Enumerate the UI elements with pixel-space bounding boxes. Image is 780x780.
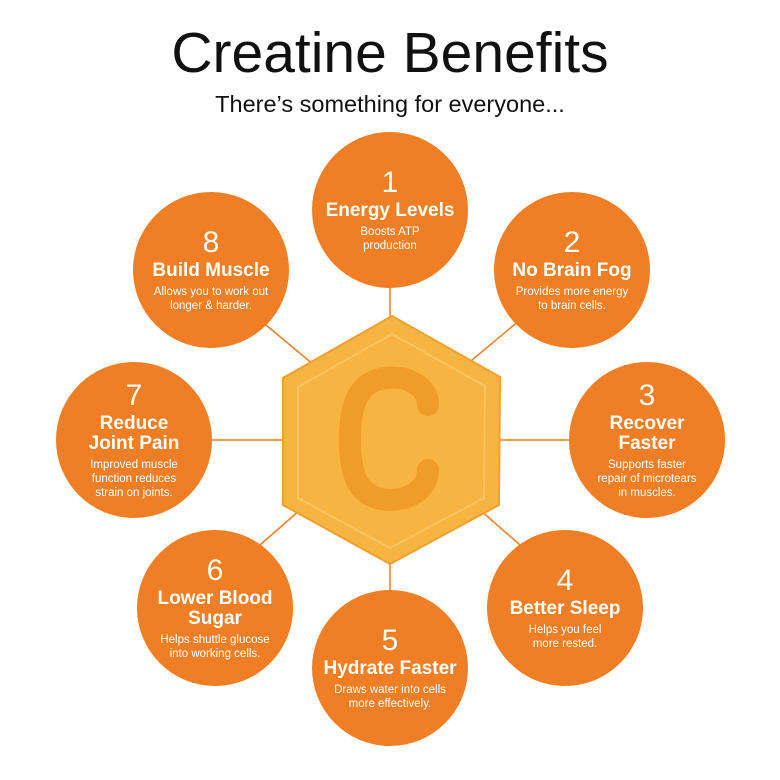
circle 7: Joint Pain — [89, 433, 179, 454]
circle 3: 3 — [639, 379, 655, 412]
circle 8: Allows you to work out — [154, 286, 268, 298]
title: Creatine Benefits — [171, 21, 609, 85]
circle 7 — [56, 362, 212, 518]
circle 2: No Brain Fog — [512, 260, 632, 281]
circle 2: to brain cells. — [538, 300, 606, 312]
circle 3: Faster — [618, 433, 676, 454]
circle 8: longer & harder. — [170, 300, 252, 312]
circle 7: function reduces — [92, 473, 176, 485]
circle 2: Provides more energy — [516, 286, 628, 298]
circle 6: Helps shuttle glucose — [160, 634, 270, 646]
circle 8 — [133, 192, 289, 348]
circle 7: strain on joints. — [95, 487, 173, 499]
circle 1: production — [363, 240, 417, 252]
circle 6: into working cells. — [170, 648, 260, 660]
circle 5: Hydrate Faster — [323, 658, 457, 679]
circle 8: Build Muscle — [152, 260, 270, 281]
circle 6: 6 — [207, 554, 223, 587]
circle 4 — [487, 530, 643, 686]
circle 2 — [494, 192, 650, 348]
circle 8: 8 — [203, 226, 219, 259]
circle 1: Energy Levels — [326, 200, 454, 221]
circle 6: Lower Blood — [157, 588, 273, 609]
circle 5: more effectively. — [349, 698, 431, 710]
circle 7: Improved muscle — [90, 459, 178, 471]
icon: creatine hexagon — [283, 316, 500, 564]
circle 1: Boosts ATP — [360, 226, 420, 238]
circle 6 — [137, 530, 293, 686]
circle 5: 5 — [382, 624, 398, 657]
circle 5: Draws water into cells — [334, 684, 446, 696]
circle 3: in muscles. — [618, 487, 676, 499]
circle 4: Helps you feel — [529, 624, 601, 636]
circle 3: Recover — [610, 413, 684, 434]
circle 3: repair of microtears — [597, 473, 697, 485]
circle 1 — [312, 132, 468, 288]
circle 2: 2 — [564, 226, 580, 259]
circle 6: Sugar — [188, 608, 242, 629]
circle 4: 4 — [557, 564, 573, 597]
circle 5 — [312, 590, 468, 746]
circle 4: more rested. — [533, 638, 597, 650]
circle 7: Reduce — [100, 413, 168, 434]
circle 3 — [569, 362, 725, 518]
circle 4: Better Sleep — [510, 598, 620, 619]
subtitle: There’s something for everyone... — [215, 91, 565, 117]
circle 3: Supports faster — [608, 459, 686, 471]
circle 1: 1 — [382, 166, 398, 199]
circle 7: 7 — [126, 379, 142, 412]
